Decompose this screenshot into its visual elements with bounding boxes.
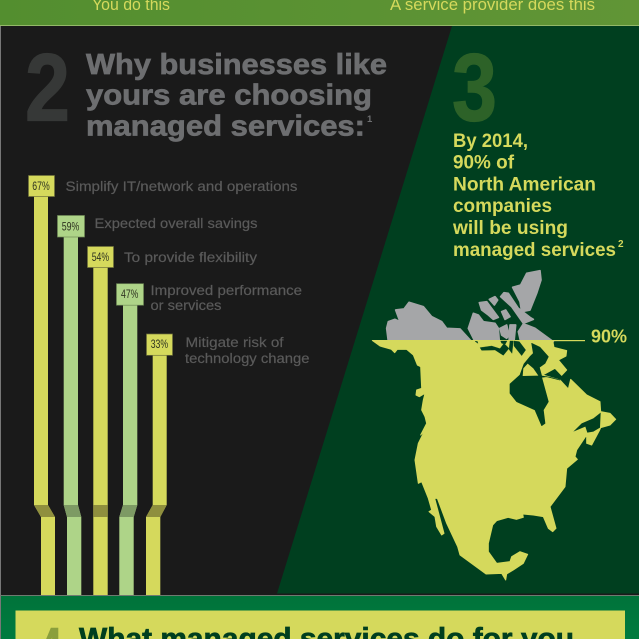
map: hudson bay (510, 343, 560, 426)
bar: 47% performance (116, 283, 302, 596)
bar: 54% flexibility (88, 246, 257, 596)
callout: 90 percent: 90% (591, 326, 627, 346)
statistic text: managed services (453, 239, 616, 261)
map: gulf of st lawrence (573, 413, 601, 433)
statistic text: 2 (618, 239, 624, 250)
heading: managed services: (86, 110, 365, 142)
bar: 33% risk: technology change (185, 351, 310, 366)
statistic text: 90% of (453, 152, 514, 174)
map: mainland 90 percent (372, 340, 616, 580)
panel 3: north america forecast (277, 26, 639, 594)
bar: 33% risk: Mitigate risk of (186, 335, 284, 350)
bar: 47% performance: or services (150, 298, 222, 313)
statistic text: By 2014, (453, 130, 528, 152)
bar: 67% simplify: Simplify IT/network and operations (66, 179, 298, 194)
bar: 54% flexibility: 54% (92, 250, 109, 264)
map: northern 10 percent (387, 271, 553, 342)
map: southampton island (523, 364, 538, 376)
statistic text: companies (453, 195, 552, 217)
heading: yours are choosing (86, 80, 372, 112)
map: north america (372, 271, 616, 580)
statistic text (452, 130, 624, 261)
number 2: 2 (25, 34, 70, 142)
bar: 54% flexibility: To provide flexibility (124, 250, 257, 265)
top banner (0, 0, 639, 26)
number 3: 3 (452, 34, 497, 142)
bar: 47% performance: Improved performance (150, 283, 302, 298)
bar: 47% performance: 47% (121, 287, 139, 301)
bar: 59% savings: 59% (62, 220, 80, 234)
heading: Why businesses like (86, 49, 387, 81)
bar: 33% risk: 33% (151, 337, 168, 351)
inner yellow card (16, 610, 625, 639)
map: northern channels (475, 341, 526, 356)
bar: 67% simplify: 67% (32, 179, 50, 193)
bar: 67% simplify (28, 176, 298, 596)
panel 4: what managed services do for you (0, 595, 639, 639)
callout: 90 percent (553, 326, 627, 346)
statistic text: will be using (452, 217, 568, 239)
heading (86, 49, 387, 142)
bar: 59% savings (58, 216, 258, 596)
bar: 59% savings: Expected overall savings (94, 216, 258, 231)
bar: 33% risk (146, 334, 310, 596)
heading: 1 (367, 114, 373, 125)
statistic text: North American (453, 174, 596, 196)
